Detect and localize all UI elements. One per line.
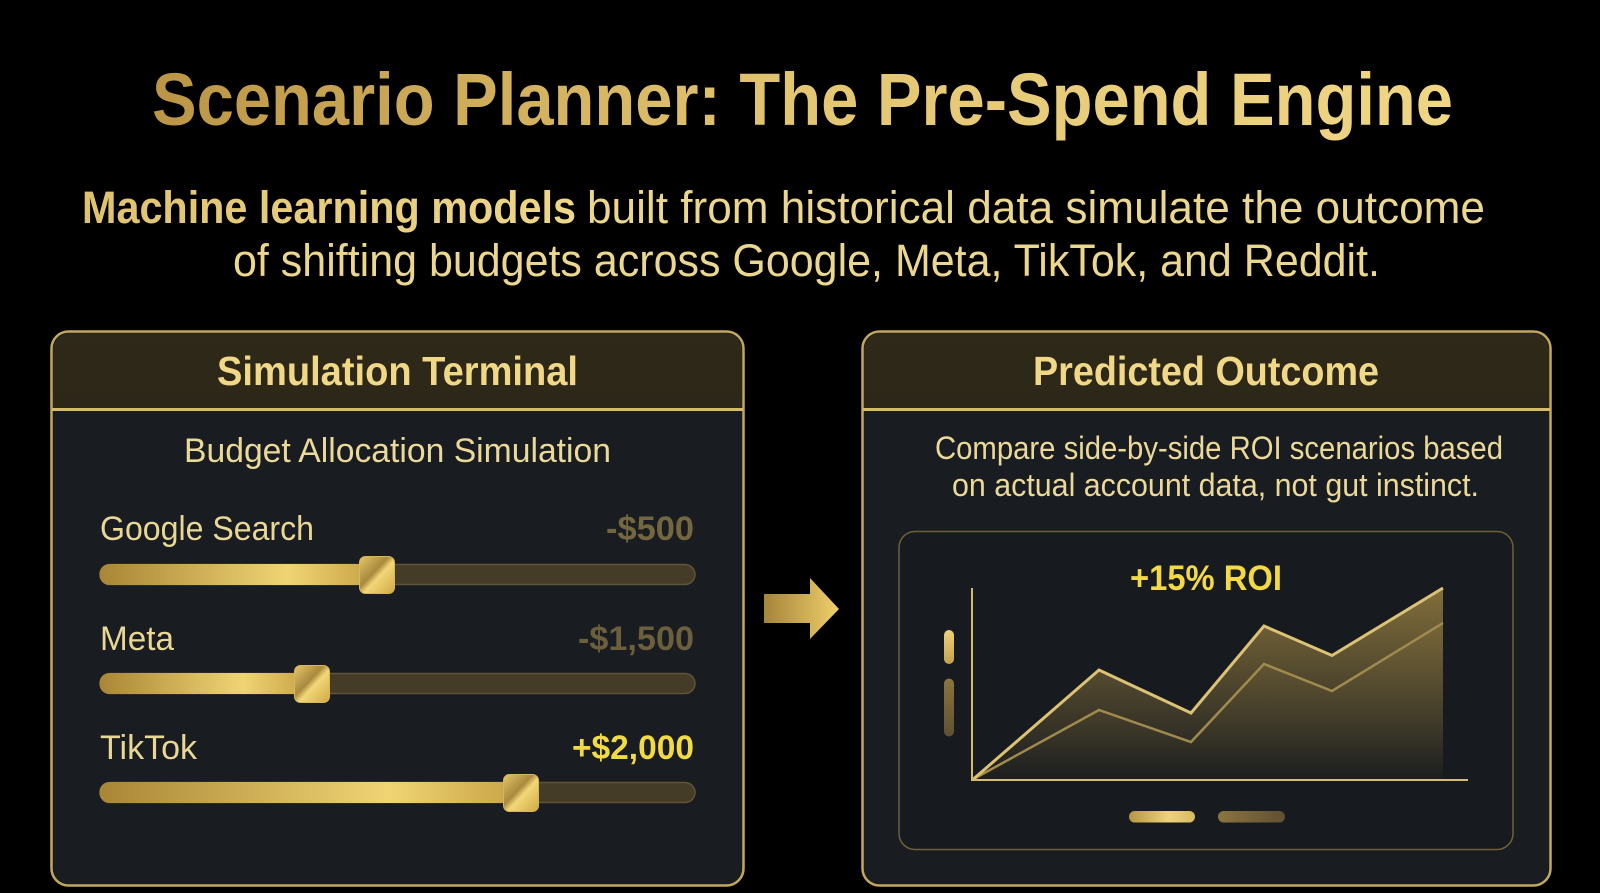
subtitle text block: Machine learning models [82,182,576,233]
slider: google search [100,510,695,594]
slider: google search: Google Search [100,510,314,548]
chart card [899,532,1513,850]
subtitle text block [82,182,1485,286]
panel header: simulation terminal [52,333,743,411]
panel subheading: Budget Allocation Simulation [184,432,611,470]
subtitle text block: built from historical data simulate the outcome [587,182,1485,233]
area chart [972,588,1468,780]
slider: meta [100,620,695,702]
slider: tiktok: +$2,000 [572,729,694,767]
slider: tiktok [100,729,695,812]
subtitle text block: of shifting budgets across Google, Meta, TikTok, and Reddit. [233,235,1380,286]
panel: simulation terminal [52,332,744,886]
title: Scenario Planner: The Pre-Spend Engine [152,58,1453,141]
panel header: predicted outcome [863,333,1550,411]
slider: google search: -$500 [606,510,694,548]
slider: meta: Meta [100,620,174,658]
slider: meta: -$1,500 [578,620,694,658]
arrow [764,578,839,639]
panel header: simulation terminal: Simulation Terminal [217,348,578,394]
description text: on actual account data, not gut instinct. [952,467,1479,503]
chart legend: vertical pills [944,630,954,736]
slider: tiktok: TikTok [100,729,198,767]
panel: predicted outcome [862,332,1550,886]
description text: Compare side-by-side ROI scenarios based [935,430,1503,466]
description text [935,430,1503,503]
chart legend: horizontal pills [1129,811,1285,822]
roi label: +15% ROI [1130,559,1282,598]
panel header: predicted outcome: Predicted Outcome [1033,348,1379,394]
